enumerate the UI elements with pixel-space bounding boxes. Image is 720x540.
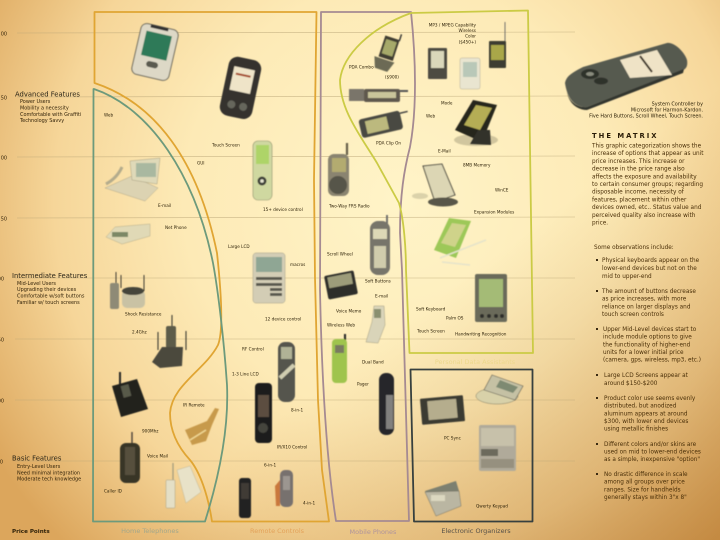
outline: personal data assistants (340, 10, 533, 353)
feature annotations: RF Control (242, 346, 264, 352)
list: observations: among all groups over price (604, 480, 685, 486)
text block: matrix description: affects the exposure and availability (592, 174, 697, 180)
feature annotations: IR/X10 Control (277, 444, 307, 450)
list: observations: Product color use seems evenly (604, 396, 696, 402)
category labels: Electronic Organizers (441, 527, 511, 535)
feature annotations: IR Remote (183, 402, 205, 408)
region outlines (93, 10, 533, 522)
device: green touch remote (253, 141, 272, 200)
feature annotations: E-Mail (438, 148, 451, 154)
feature annotations: Handwriting Recognition (455, 332, 507, 336)
feature labels: basic: Moderate tech knowledge (17, 476, 81, 482)
heading: the matrix: THE MATRIX (592, 132, 658, 140)
device: Palm (475, 274, 507, 322)
price axis labels: 00 (1, 32, 7, 38)
text block: matrix description: devices owned, etc.. Status value and (592, 205, 702, 211)
price axis labels: 50 (1, 96, 7, 102)
device: antenna phone on base (152, 315, 186, 368)
list: observations: around $150-$200 (604, 381, 658, 387)
feature annotations: Two-Way FRS Radio (328, 204, 370, 208)
device: silver PDA (131, 22, 179, 82)
device: bar phone (349, 89, 408, 102)
feature annotations: Dual Band (362, 360, 384, 364)
feature labels: advanced (15, 90, 81, 124)
feature annotations: 4-in-1 (303, 500, 316, 506)
list: observations: (camera, gps, wireless, mp3, etc.) (603, 358, 701, 364)
feature annotations: Expansion Modules (474, 210, 514, 214)
list: observations: the functionality of higher-end (603, 342, 691, 348)
feature annotations: Large LCD (228, 244, 250, 249)
device: two-way radio (328, 143, 349, 196)
feature labels: advanced: Technology Savvy (19, 118, 64, 124)
feature annotations: Soft Buttons (365, 278, 391, 284)
feature labels: advanced: Comfortable with Graffiti (20, 112, 81, 118)
list: observations: ranges. Size for handhelds (604, 487, 681, 493)
price axis labels (0, 32, 7, 466)
feature labels: intermediate: Intermediate Features (12, 272, 88, 280)
device: pager phone (379, 373, 394, 435)
category labels: Personal Data Assistants (435, 358, 516, 366)
feature annotations: Caller ID (104, 488, 122, 494)
text block: matrix description: to certain consumer groups; regarding (592, 182, 703, 188)
device caption (589, 102, 703, 120)
device: hand-held remote (275, 470, 293, 507)
text block: matrix description: price. (592, 220, 608, 226)
feature labels: intermediate: Mid-Level Users (17, 281, 56, 287)
device: PDA combo (371, 29, 403, 73)
list: observations: reliance on larger displays and (602, 304, 691, 310)
list: observations: using metallic finishes (604, 426, 668, 432)
text block: matrix description: This graphic categorization shows the (591, 144, 702, 150)
list: observations: used on mid to lower-end devices (604, 450, 701, 456)
outline: electronic organizers (410, 370, 532, 522)
feature annotations: Net Phone (165, 225, 187, 230)
feature annotations: 8MB Memory (463, 162, 491, 168)
feature annotations: 6-in-1 (264, 462, 277, 468)
feature labels: intermediate: Comfortable w/soft buttons (17, 294, 85, 300)
device: curved PDA on stand (412, 164, 458, 206)
list: observations: mid to upper-end (602, 274, 652, 280)
feature annotations: GUI (197, 160, 205, 166)
category labels: Remote Controls (250, 527, 305, 535)
feature annotations: Voice Memo (336, 308, 362, 314)
feature annotations: PC Sync (444, 436, 462, 440)
list: observations: No drastic difference in scale (604, 472, 688, 478)
feature labels: intermediate (12, 272, 88, 306)
device: keyboard clamshell (476, 375, 523, 404)
device: green mobile (332, 334, 347, 383)
device: scroll wheel phone (370, 215, 390, 275)
feature annotations: 900Mhz (142, 428, 159, 434)
feature labels: intermediate: Familiar w/ touch screens (17, 300, 80, 306)
text block: matrix description: perceived quality also increase with (592, 213, 696, 219)
feature annotations: Palm OS (446, 316, 464, 320)
outline: remote controls (94, 12, 329, 522)
feature annotations: 8-in-1 (291, 408, 304, 412)
feature annotations: Color (465, 34, 476, 38)
list: observations: touch screen controls (602, 312, 664, 318)
list: observations: distributed, but anodized (604, 404, 677, 410)
price axis labels: 50 (1, 216, 7, 222)
list: observations: Large LCD Screens appear at (604, 373, 689, 379)
category labels: Mobile Phones (350, 528, 397, 536)
feature annotations: PDA Combo (349, 64, 374, 70)
text block: matrix description: disposable income, necessity of (592, 190, 685, 196)
feature labels: basic: Basic Features (12, 454, 62, 462)
feature labels: advanced: Power Users (20, 99, 51, 105)
feature annotations: macros (290, 262, 305, 267)
devices layer (105, 22, 687, 518)
price axis labels: 00 (1, 156, 7, 162)
device: system controller (565, 43, 687, 110)
device caption: System Controller by (652, 102, 703, 108)
text block: matrix description (591, 144, 704, 226)
device: PDA antenna (489, 22, 506, 68)
list: observations: aluminum appears at around (604, 411, 688, 417)
feature annotations: Touch Screen (211, 142, 240, 148)
feature annotations: Wireless Web (327, 322, 355, 328)
device: gold IR remote (185, 408, 219, 445)
feature annotations: ($900) (385, 74, 399, 80)
device: white cordless (166, 463, 201, 508)
feature annotations: Shock Resistance (125, 312, 162, 316)
feature annotations: E-mail (375, 294, 388, 298)
feature annotations: Pager (357, 382, 369, 386)
text block: matrix description: decrease in the price range also (592, 167, 685, 173)
text block: matrix description: features, placement within other (592, 197, 687, 203)
category labels (121, 358, 516, 536)
list: observations: $300, with lower end devices (604, 419, 688, 425)
feature annotations: Web (426, 114, 435, 118)
feature annotations: Soft Keyboard (416, 306, 446, 312)
feature annotations: 2.4Ghz (132, 330, 148, 334)
feature annotations: 1-3 Line LCD (232, 372, 259, 376)
device: black cylinder phone (120, 432, 140, 483)
list: observations (596, 258, 701, 501)
device: RF remote (278, 342, 295, 402)
device caption: Five Hard Buttons, Scroll Wheel, Touch Screen. (589, 114, 703, 120)
device: qwerty organizer (425, 481, 461, 516)
device: flip phone (366, 306, 385, 343)
device: PDA clip-on (358, 109, 411, 138)
feature annotations: Touch Screen (416, 328, 445, 334)
list: observations: as a simple, inexpensive "option" (604, 457, 700, 463)
device: small black remote (239, 478, 251, 518)
device caption: Microsoft for Harmon-Kardon. (631, 108, 703, 114)
list: observations: include module options to give (603, 335, 692, 341)
feature annotations: MP3 / MPEG Capability (429, 22, 477, 28)
feature annotations: Web (104, 112, 113, 118)
feature labels: intermediate: Upgrading their devices (17, 287, 77, 293)
feature annotations: Qwerty Keypad (476, 504, 508, 508)
list: observations: units for a lower initial price (603, 350, 684, 356)
device: PC sync organizer (420, 395, 465, 425)
device: large LCD remote (253, 253, 285, 303)
list: observations: Different colors and/or skins are (604, 442, 697, 448)
list: observations: lower-end devices but not on the (602, 266, 697, 272)
feature annotations: ($450+) (459, 40, 476, 44)
feature annotations: 12 device control (265, 316, 301, 322)
feature labels: advanced: Mobility a necessity (20, 106, 69, 112)
device: PDA dark (428, 48, 447, 79)
outline: mobile phones (320, 12, 415, 521)
feature annotations (104, 22, 514, 508)
device: net phone box (106, 224, 150, 244)
list: observations: generally stays within 3"x 8" (604, 495, 687, 501)
device: green translucent PDA (434, 218, 486, 265)
feature annotations: Mode (441, 100, 453, 106)
device: cordless with base (110, 272, 145, 309)
feature labels: basic (12, 454, 81, 482)
category labels: Home Telephones (121, 527, 179, 535)
feature annotations: Voice Mail (147, 454, 168, 458)
device: black handheld (218, 55, 263, 121)
device: black desk phone (112, 372, 148, 417)
device: silver organizer (479, 425, 516, 471)
feature annotations: Wireless (458, 28, 476, 33)
text block: matrix description: price increases. This increase or (592, 159, 685, 165)
device: PDA white (460, 58, 480, 89)
device: small clamshell (324, 270, 358, 300)
device: black IR/X10 remote (255, 383, 272, 443)
device: desktop screen phone (105, 158, 160, 201)
feature labels: basic: Entry-Level Users (17, 464, 61, 470)
price grid lines (15, 32, 575, 461)
device: PDA in cradle (454, 100, 498, 146)
feature annotations: 15+ device control (263, 207, 303, 212)
text block: observations intro: Some observations include: (594, 245, 674, 251)
list: observations: The amount of buttons decrease (601, 289, 696, 295)
axis title: price points: Price Points (12, 529, 50, 535)
feature annotations: E-mail (158, 203, 171, 208)
text block: matrix description: increase of options that appear as unit (592, 151, 704, 157)
list: observations: Upper Mid-Level devices start to (603, 327, 697, 333)
list: observations: Physical keyboards appear on the (602, 258, 700, 264)
feature annotations: Scroll Wheel (327, 252, 353, 256)
feature labels: basic: Need minimal integration (17, 470, 80, 476)
feature labels: advanced: Advanced Features (15, 90, 80, 98)
outline: home telephones (93, 89, 227, 522)
list: observations: as price increases, with more (602, 297, 687, 303)
feature annotations: PDA Clip On (376, 140, 401, 146)
feature annotations: WinCE (495, 188, 509, 192)
